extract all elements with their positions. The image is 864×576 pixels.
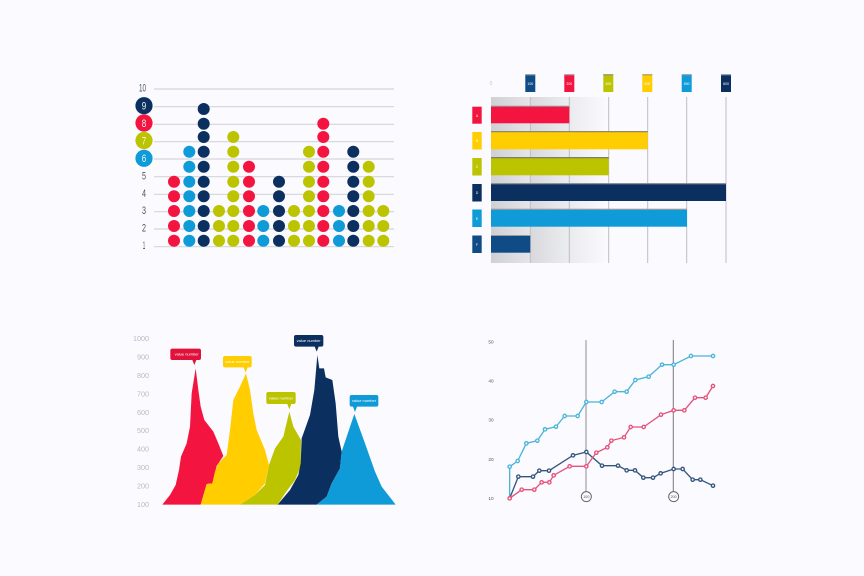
dots: column 9 olive [288,205,300,247]
bar: navy [491,183,726,201]
top axis labels [490,74,731,92]
bar: yellow [491,131,648,149]
callout: olive [266,392,296,409]
dots: column 13 navy [347,146,359,247]
left axis tabs: C [476,165,479,169]
dots: column 8 navy [273,176,285,247]
y axis labels: 50 [488,339,494,344]
axis labels: dot chart plain numbers: 1 [143,240,145,252]
top axis labels: 600 [723,82,729,86]
y axis labels: 900 [137,352,149,362]
line: blue series [508,354,715,498]
y axis labels: 10 [488,496,494,501]
y axis labels: 100 [137,500,149,509]
callout: yellow [223,356,252,373]
axis labels: dot chart plain numbers: 4 [142,188,146,200]
bar: blue [491,209,687,227]
dots: column 10 olive [303,146,315,247]
callout: navy [294,335,323,352]
y axis labels: 400 [137,444,149,454]
dots: column 1 red [168,176,180,247]
top axis labels: 200 [566,82,572,86]
y axis labels: 700 [137,390,149,398]
y axis labels: 800 [137,371,149,380]
marker: 100: 100 [583,495,589,499]
callout: blue [350,395,378,412]
left axis tabs [472,107,482,253]
left axis tabs: E [476,217,479,221]
top axis labels: 400 [644,82,650,86]
chart: horizontal bars [472,74,731,263]
callout: navy: value number [297,338,321,343]
chart: dot matrix columns [135,82,394,252]
top axis labels: 0 [490,81,493,87]
bar: dark blue [491,235,530,253]
top axis labels: 300 [605,82,611,86]
axis labels: dot chart plain numbers [139,82,146,252]
y axis labels: 30 [488,418,494,423]
y axis labels: 20 [488,457,494,462]
legend badges: 9 8 7 6: 7 [142,135,146,147]
y axis labels: 600 [137,408,149,417]
dots: column 5 olive [227,131,239,247]
axis labels: dot chart plain numbers: 5 [142,170,146,182]
callout: blue: value number [352,398,377,403]
top axis labels: 100 [527,82,533,86]
left axis tabs: A [476,114,479,118]
dots: column 2 blue [183,146,195,247]
area: blue [317,414,396,505]
y axis labels: 200 [137,482,149,490]
left axis tabs: D [476,191,479,195]
area: navy [278,355,342,505]
area: olive [240,412,301,505]
bar: red [491,106,569,123]
chart: overlapping area peaks [133,334,396,509]
y axis labels: 500 [137,426,149,435]
callout: olive: value number [269,395,294,400]
legend badges: 9 8 7 6: 8 [142,118,146,130]
legend badges: 9 8 7 6 [135,97,153,167]
y axis labels: 300 [137,463,149,472]
axis labels: dot chart plain numbers: 10 [139,82,146,94]
dots: column 6 red [243,161,255,247]
marker: 200: 200 [671,495,677,499]
y axis labels: 40 [488,378,494,383]
area: yellow [201,373,269,505]
callout: red [170,349,201,365]
callout: red: value number [175,352,199,357]
dots: column 4 olive [213,205,225,247]
legend badges: 9 8 7 6: 9 [142,100,146,112]
bar: olive [491,157,609,175]
axis labels: dot chart plain numbers: 2 [142,222,146,234]
chart: line graph [488,339,715,502]
axis labels: dot chart plain numbers: 3 [142,205,146,217]
y axis labels [133,334,149,509]
dots: column 15 olive [377,205,389,247]
left axis tabs: F [476,243,478,247]
dots: column 3 navy [198,103,210,247]
callout: yellow: value number [225,359,250,364]
dots: column 7 blue [257,205,269,247]
marker: 100 [581,340,591,502]
dots: column 12 blue [333,205,345,247]
y axis labels: 1000 [133,334,149,343]
dots: column 11 red [317,118,329,247]
legend badges: 9 8 7 6: 6 [142,153,146,165]
left axis tabs: B [476,139,479,143]
line: navy series [510,450,715,498]
area: red [162,368,223,505]
marker: 200 [669,340,679,502]
dots: column 14 olive [363,161,375,247]
y axis labels [488,339,494,501]
top axis labels: 500 [684,82,690,86]
line: red series [508,384,715,500]
